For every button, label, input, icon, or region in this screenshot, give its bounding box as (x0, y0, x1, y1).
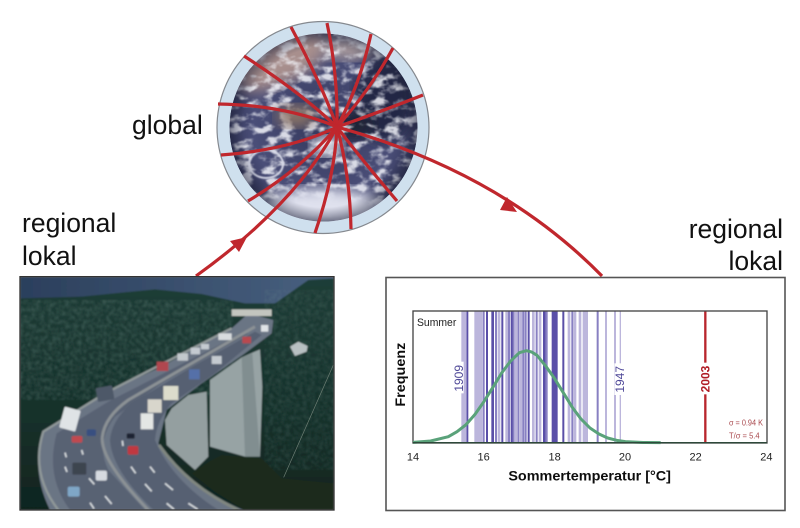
observed summer lines (464, 311, 620, 443)
arrow: left connector arrowhead (230, 237, 247, 252)
label: Summer: Summer (417, 317, 457, 329)
forest (20, 278, 334, 510)
statistics annotation: σ = 0.94 K (729, 418, 764, 427)
road right lanes (110, 332, 262, 510)
label 1909: 1909 (452, 365, 466, 392)
white house (290, 342, 308, 356)
road surface (38, 313, 273, 510)
pillar 1 (165, 392, 208, 470)
arrow: right connector arrowhead (500, 197, 517, 212)
chart frame (386, 278, 785, 510)
road left lanes (53, 333, 248, 510)
red meridian lines (218, 23, 423, 233)
wire (284, 365, 333, 477)
pillar 2 (210, 349, 262, 457)
x tick labels: 24 (760, 451, 772, 463)
label: regional lokal left: lokal (22, 241, 77, 271)
trees in front (204, 456, 334, 510)
label: global: global (132, 110, 203, 140)
road edge right (159, 445, 238, 510)
sky (20, 277, 334, 304)
x tick labels: 22 (690, 451, 702, 463)
connector: globe to chart (337, 127, 602, 276)
axis baseline (413, 441, 767, 445)
x tick labels: 14 (407, 451, 419, 463)
label 1947: 1947 (613, 366, 627, 393)
y axis title: Frequenz (393, 342, 408, 407)
photo frame (20, 277, 334, 510)
x tick labels: 16 (478, 451, 490, 463)
gaussian curve (413, 351, 661, 443)
panel: summer temperature chart (386, 278, 785, 510)
x tick labels (407, 451, 772, 463)
2003 line (702, 311, 709, 443)
label 2003: 2003 (698, 365, 712, 392)
x tick labels: 20 (619, 451, 631, 463)
x tick labels: 18 (549, 451, 561, 463)
x axis title: Sommertemperatur [°C] (508, 469, 671, 484)
plot border (413, 311, 767, 443)
statistics annotation (729, 418, 764, 441)
earth image (230, 34, 418, 222)
label: regional lokal left: regional (22, 208, 116, 238)
road edge left (39, 328, 232, 510)
statistics annotation: T/σ = 5.4 (729, 432, 760, 441)
label: regional lokal right: regional (689, 214, 783, 244)
connector: globe to highway photo (196, 127, 337, 276)
median (102, 327, 255, 510)
panel: highway bridge photo (20, 277, 334, 510)
vehicles (59, 325, 268, 497)
globe (217, 16, 429, 234)
label: regional lokal right: lokal (728, 246, 783, 276)
globe outer ring (217, 22, 429, 234)
distant buildings (232, 309, 272, 316)
lane markings (65, 441, 198, 509)
